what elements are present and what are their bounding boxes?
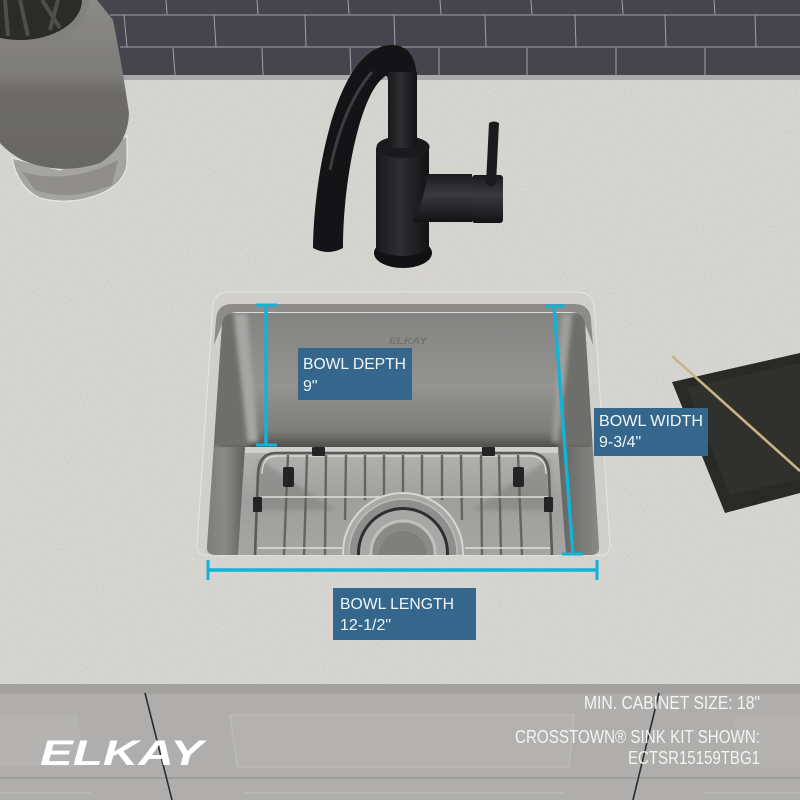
floor: [238, 447, 566, 555]
door panels: [0, 715, 84, 767]
glass base: [12, 136, 127, 201]
bowl interior: [200, 305, 610, 560]
left wall: [205, 447, 245, 555]
wall shading: [207, 314, 600, 447]
tray: [672, 353, 800, 513]
footer: cabinet size and kit: [515, 693, 760, 768]
grid bumpers: [253, 447, 553, 512]
vase body: [0, 0, 129, 169]
label: bowl length: [333, 588, 476, 640]
sink rim: [197, 292, 610, 555]
door gaps: [145, 693, 659, 800]
right wall: [558, 447, 601, 555]
handle arm: [412, 174, 472, 222]
faucet: [313, 45, 503, 268]
footer: cabinet size and kit: CROSSTOWN® SINK KIT SHOWN:: [515, 727, 760, 747]
handle cap: [472, 175, 503, 223]
label: bowl length: BOWL LENGTH: [340, 596, 454, 613]
dimension: bowl depth line: [256, 305, 277, 446]
vase mouth: [0, 0, 89, 50]
footer: cabinet size and kit: ECTSR15159TBG1: [628, 748, 760, 768]
gold stick: [672, 356, 800, 471]
vase with glass base: [0, 0, 129, 201]
sink: [196, 292, 610, 556]
spout: [313, 45, 417, 252]
bottom grid: [253, 447, 553, 555]
dimension: bowl width line: [545, 306, 583, 554]
cabinets: [0, 684, 800, 800]
label: bowl depth: BOWL DEPTH: [303, 356, 406, 373]
label: bowl depth: [298, 348, 412, 400]
label: bowl depth: 9": [303, 378, 318, 395]
dark lip: [214, 304, 593, 345]
back wall: [220, 312, 590, 447]
back wall logo: ELKAY: [389, 336, 429, 347]
riser: [388, 72, 417, 152]
countertop: [0, 76, 800, 686]
label: bowl width: BOWL WIDTH: [599, 413, 703, 430]
label: bowl width: [594, 408, 708, 456]
dimension: bowl length line: [208, 560, 597, 580]
elkay logo: ELKAY: [40, 734, 207, 773]
body: [376, 138, 429, 256]
drain strainer: [342, 492, 464, 555]
label: bowl width: 9-3/4": [599, 434, 641, 451]
label: bowl length: 12-1/2": [340, 617, 391, 634]
footer: cabinet size and kit: MIN. CABINET SIZE: 18": [584, 693, 760, 713]
base ring: [374, 238, 432, 268]
backsplash tile wall: [0, 0, 800, 80]
lever: [486, 122, 499, 186]
